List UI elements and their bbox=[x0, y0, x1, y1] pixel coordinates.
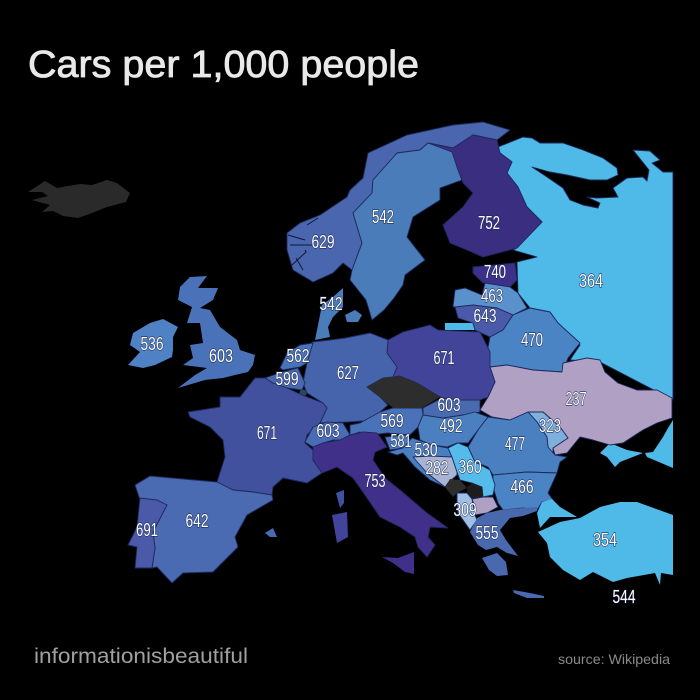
country: Kosovo bbox=[467, 483, 483, 499]
country: Ireland bbox=[128, 319, 178, 368]
title: Cars per 1,000 people bbox=[28, 44, 419, 86]
country: Greece bbox=[470, 507, 544, 598]
value labels: 671 bbox=[434, 347, 454, 368]
country: Mallorca bbox=[265, 528, 277, 537]
value labels: 237 bbox=[566, 388, 586, 409]
value labels: 603 bbox=[438, 394, 460, 415]
country: Ukraine bbox=[480, 358, 672, 455]
country: Estonia bbox=[473, 263, 517, 287]
value labels: 555 bbox=[476, 522, 498, 543]
country: Poland bbox=[387, 325, 495, 400]
country: France bbox=[188, 378, 327, 495]
country: Slovakia bbox=[423, 398, 480, 419]
country: Czech Republic bbox=[367, 376, 440, 408]
country: Russia bbox=[445, 137, 673, 468]
country: Lithuania bbox=[455, 305, 513, 337]
country: North Macedonia bbox=[472, 497, 498, 515]
country: Germany bbox=[303, 333, 397, 423]
value labels: 569 bbox=[380, 410, 404, 431]
value labels: 323 bbox=[539, 415, 561, 436]
value labels: 643 bbox=[474, 305, 496, 326]
country: Hungary bbox=[418, 412, 488, 447]
value labels: 753 bbox=[364, 470, 386, 491]
country: Moldova bbox=[528, 412, 568, 455]
value labels: 466 bbox=[510, 476, 534, 497]
value labels: 603 bbox=[316, 420, 340, 441]
value labels: 542 bbox=[320, 293, 342, 314]
country: Slovenia bbox=[385, 435, 412, 450]
country: Portugal bbox=[128, 498, 167, 568]
value labels: 627 bbox=[337, 362, 359, 383]
value labels: 309 bbox=[454, 499, 476, 520]
value labels: 629 bbox=[312, 231, 334, 252]
value labels: 544 bbox=[612, 586, 636, 607]
value labels: 599 bbox=[276, 368, 298, 389]
value labels: 642 bbox=[186, 510, 208, 531]
country: Bulgaria bbox=[493, 472, 557, 510]
country: Finland bbox=[428, 135, 542, 257]
value labels: 477 bbox=[505, 433, 525, 454]
value labels: 562 bbox=[286, 345, 310, 366]
country: Luxembourg bbox=[299, 389, 307, 397]
country: Croatia bbox=[388, 438, 452, 487]
value labels: 530 bbox=[414, 439, 438, 460]
value labels: 470 bbox=[521, 329, 543, 350]
country: Latvia bbox=[453, 283, 527, 315]
value labels: 536 bbox=[140, 333, 164, 354]
country: Corsica bbox=[336, 490, 344, 508]
country: Italy bbox=[313, 432, 448, 574]
fjords bbox=[288, 218, 318, 270]
map of Europe bbox=[28, 122, 673, 598]
country: Turkey bbox=[537, 499, 673, 585]
value labels: 691 bbox=[136, 519, 158, 540]
country: Switzerland bbox=[305, 422, 350, 447]
country: Belarus bbox=[487, 308, 580, 372]
country: Spain bbox=[135, 476, 273, 583]
value labels bbox=[136, 206, 636, 607]
value labels: 463 bbox=[481, 285, 503, 306]
source note: source: Wikipedia bbox=[558, 651, 670, 667]
value labels: 492 bbox=[440, 415, 462, 436]
country: Serbia bbox=[448, 443, 495, 497]
country: United Kingdom bbox=[178, 276, 255, 388]
country: Bosnia bbox=[413, 456, 457, 487]
value labels: 581 bbox=[390, 430, 412, 451]
country: Albania bbox=[457, 493, 477, 530]
brand wordmark: informationisbeautiful bbox=[34, 645, 248, 668]
value labels: 542 bbox=[372, 206, 394, 227]
value labels: 364 bbox=[579, 270, 603, 291]
value labels: 360 bbox=[458, 456, 482, 477]
country: Belgium bbox=[265, 368, 305, 390]
country: Sweden bbox=[350, 143, 462, 320]
value labels: 354 bbox=[593, 529, 617, 550]
country: Austria bbox=[350, 408, 423, 435]
country: Montenegro bbox=[445, 479, 467, 497]
country: Romania bbox=[468, 412, 567, 475]
value labels: 282 bbox=[426, 457, 448, 478]
country: Netherlands bbox=[280, 343, 313, 370]
country: Iceland bbox=[28, 180, 130, 218]
country: Denmark bbox=[315, 288, 362, 340]
value labels: 740 bbox=[484, 261, 506, 282]
country: Norway bbox=[287, 122, 510, 282]
value labels: 752 bbox=[478, 212, 500, 233]
value labels: 671 bbox=[257, 422, 277, 443]
value labels: 603 bbox=[209, 345, 233, 366]
